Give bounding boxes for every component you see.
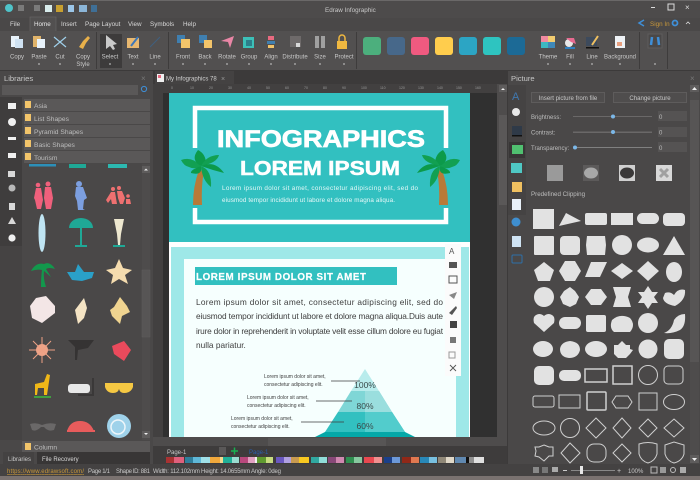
predefined clipping shapes (533, 209, 685, 385)
header banner (169, 93, 470, 242)
library scrollbar (142, 164, 150, 440)
picture tool icons: A (512, 91, 520, 103)
picture sliders: Transparency: (531, 146, 569, 152)
pyramid chart: consectetur adipiscing elit. (231, 424, 290, 430)
picture sliders: 0 (659, 130, 663, 136)
library category rows: Tourism (34, 155, 58, 162)
panel: libraries (0, 71, 153, 464)
ribbon toolbar: Size (314, 54, 326, 60)
title bar: × (685, 3, 690, 12)
picture sliders: 0 (659, 146, 663, 152)
canvas with rulers: 60 (285, 86, 289, 90)
pyramid chart: 100% (354, 380, 376, 390)
document tab bar (153, 71, 507, 84)
library category rows: List Shapes (34, 116, 70, 123)
ribbon toolbar: Protect (334, 54, 354, 60)
canvas with rulers: 20 (209, 86, 213, 90)
pyramid chart: 60% (356, 421, 374, 431)
canvas with rulers (153, 84, 507, 437)
ribbon toolbar: Line (149, 54, 161, 60)
page tabs (153, 446, 507, 456)
banner text (222, 185, 418, 204)
section heading (195, 267, 397, 285)
pyramid chart: Lorem ipsum dolor sit amet, (264, 374, 326, 380)
canvas with rulers: 100 (361, 86, 367, 90)
canvas with rulers: 150 (456, 86, 462, 90)
pyramid chart: 80% (356, 401, 374, 411)
menu bar: File (10, 21, 21, 28)
ribbon toolbar: Select (102, 54, 119, 60)
banner frame (195, 108, 446, 222)
panel: picture: Picture (511, 74, 535, 83)
picture sliders: Brightness: (531, 115, 561, 121)
library shape icons (29, 164, 133, 438)
pyramid chart: consectetur adipiscing elit. (247, 403, 306, 409)
picture buttons (532, 92, 686, 102)
canvas with rulers: 110 (380, 86, 386, 90)
canvas with rulers: 140 (437, 86, 443, 90)
pyramid chart: Lorem ipsum dolor sit amet, (247, 395, 309, 401)
library category rows (24, 99, 150, 163)
status bar: Page 1/1 (88, 469, 111, 475)
menu bar: Insert (61, 21, 77, 28)
picture sliders: Contrast: (531, 130, 556, 136)
ribbon toolbar: Group (241, 54, 258, 60)
title bar (0, 0, 700, 18)
menu bar: Page Layout (85, 21, 121, 28)
library tabs (3, 452, 150, 464)
banner title: INFOGRAPHICS (217, 126, 425, 153)
ribbon toolbar: Copy (10, 54, 24, 60)
ribbon toolbar: Background (604, 54, 636, 60)
ribbon toolbar: Style (76, 62, 90, 68)
canvas with rulers: 160 (475, 86, 481, 90)
ribbon toolbar: Front (176, 54, 190, 60)
banner text: eiusmod tempor incididunt ut labore et dolore magna aliqua. (222, 197, 395, 204)
library tabs: Libraries (8, 457, 31, 463)
page tabs: Page-1 (167, 450, 187, 456)
section paragraph (196, 297, 444, 350)
menu bar: Help (183, 21, 196, 28)
banner subtitle: LOREM IPSUM (240, 158, 400, 180)
section paragraph: irure dolor in reprehenderit in voluptate velit esse cillum dolore eu fugiat (196, 326, 444, 336)
library category rows: Basic Shapes (34, 142, 76, 149)
panel: libraries: × (141, 74, 146, 83)
floating toolbar (445, 244, 461, 376)
status bar (0, 464, 700, 480)
picture sliders (531, 111, 687, 152)
canvas with rulers: 70 (304, 86, 308, 90)
picture scrollbar (690, 85, 699, 463)
floating toolbar: A (449, 247, 455, 256)
predefined clipping outline shapes (533, 366, 684, 463)
page tabs: Page-1 (249, 450, 269, 456)
ribbon toolbar: Fill (566, 54, 574, 60)
canvas with rulers: 80 (323, 86, 327, 90)
colour palette strip (153, 456, 507, 464)
canvas with rulers: 50 (266, 86, 270, 90)
panel: picture: × (690, 74, 695, 83)
ribbon toolbar: Distribute (282, 54, 308, 60)
picture sliders: 0 (659, 115, 663, 121)
content section (171, 247, 469, 437)
ribbon toolbar: Text (127, 54, 139, 60)
library category rows: Pyramid Shapes (34, 129, 84, 136)
infographic page (169, 93, 470, 437)
predefined clipping heading: Predefined Clipping (531, 191, 586, 198)
section heading: LOREM IPSUM DOLOR SIT AMET (196, 272, 366, 283)
title bar: Edraw Infographic (325, 7, 376, 14)
status bar: Shape ID: 881 (116, 469, 151, 475)
picture effect thumbnails (547, 165, 672, 181)
horizontal scrollbar (153, 437, 507, 446)
document tab bar: × (221, 76, 225, 83)
section paragraph: nulla pariatur. (196, 340, 246, 350)
picture buttons: Change picture (629, 95, 671, 102)
menu bar (10, 17, 690, 32)
ribbon toolbar (0, 31, 700, 71)
picture buttons: Insert picture from file (539, 95, 598, 102)
panel: libraries: Libraries (4, 74, 33, 83)
section paragraph: eiusmod tempor incididunt ut labore et dolore magna aliqua.Duis aute (196, 311, 443, 321)
menu bar: Sign In (650, 21, 670, 28)
library tabs: File Recovery (42, 457, 79, 463)
panel: picture (507, 71, 700, 464)
ribbon toolbar: Copy (76, 54, 90, 60)
picture tool icons (508, 85, 526, 263)
canvas with rulers: 40 (247, 86, 251, 90)
canvas with rulers: 30 (228, 86, 232, 90)
canvas with rulers: 130 (418, 86, 424, 90)
library category rows: Asia (34, 103, 47, 110)
library category icons (0, 97, 22, 440)
ribbon toolbar: Paste (31, 54, 47, 60)
pyramid chart: consectetur adipiscing elit. (264, 382, 323, 388)
column row: Column (34, 444, 57, 452)
column row (22, 441, 150, 452)
document tab bar: My Infographics 78 (166, 76, 217, 82)
ribbon toolbar: Rotate (218, 54, 236, 60)
status bar: Width: 112.102mm Height: 14.0655mm Angle: 0deg (153, 469, 281, 475)
canvas with rulers: 10 (190, 86, 194, 90)
ribbon toolbar: Cut (55, 54, 65, 60)
icon: right palm tree (417, 150, 460, 205)
section paragraph: Lorem ipsum dolor sit amet, consectetur adipiscing elit, sed do (196, 297, 443, 307)
icon: left palm tree (181, 150, 224, 205)
ribbon toolbar: Align (264, 54, 278, 60)
ribbon toolbar: Back (198, 54, 213, 60)
canvas with rulers: 90 (342, 86, 346, 90)
canvas with rulers: 0 (171, 86, 173, 90)
canvas with rulers: 120 (399, 86, 405, 90)
menu bar: View (128, 21, 142, 28)
status bar: + (617, 468, 621, 475)
menu bar: Symbols (150, 21, 174, 28)
ribbon toolbar: Line (586, 54, 598, 60)
menu bar: Home (34, 21, 51, 28)
banner text: Lorem ipsum dolor sit amet, consectetur adipiscing elit, sed do (222, 185, 418, 192)
status bar: 100% (628, 469, 644, 475)
status bar: https://www.edrawsoft.com/ (7, 469, 84, 475)
ribbon toolbar: Theme (539, 54, 558, 60)
pyramid chart (231, 369, 415, 437)
pyramid chart: Lorem ipsum dolor sit amet, (231, 416, 293, 422)
